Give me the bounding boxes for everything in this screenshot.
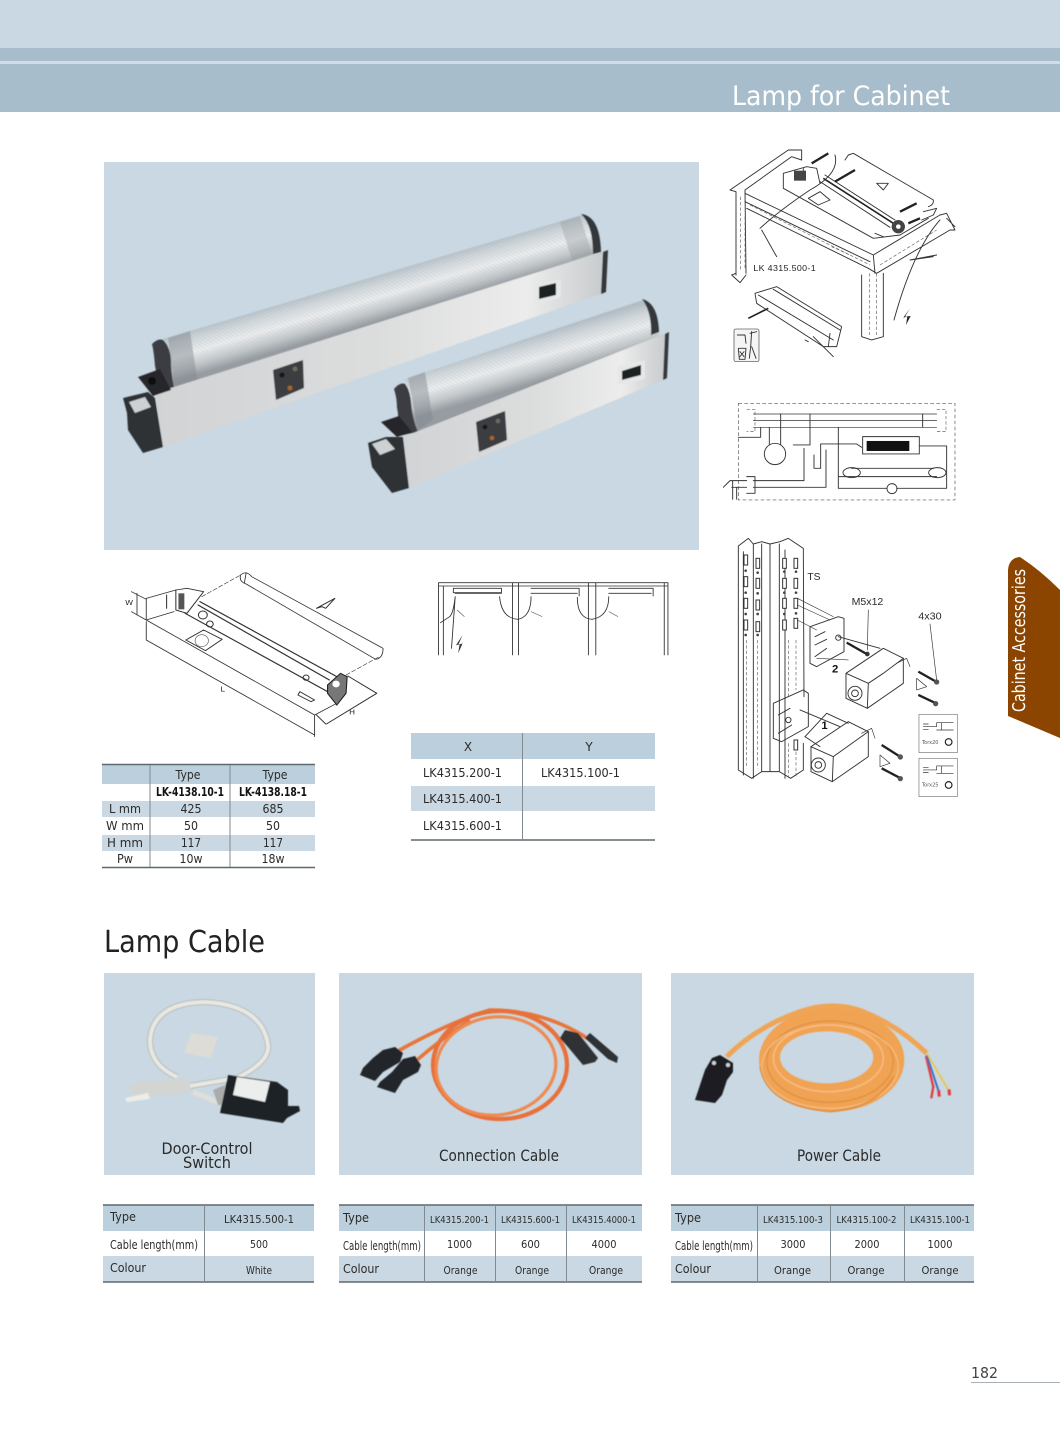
table: cable X and Y	[411, 733, 655, 840]
table: power cable specs: LK4315.100-2	[836, 1215, 896, 1226]
icon: Torx25 tool: Torx25	[921, 783, 938, 789]
table: power cable specs: Orange	[922, 1265, 958, 1277]
diagram: cabinet mounting assembly	[730, 150, 955, 362]
label: L: L	[220, 685, 226, 694]
table: connection cable specs	[339, 1205, 642, 1282]
page number: 182	[971, 1364, 998, 1382]
panel: door-control switch	[104, 973, 315, 1175]
table: lamp dimensions: Pw	[117, 852, 133, 866]
table: connection cable specs: Type	[342, 1211, 369, 1225]
table: power cable specs: 2000	[854, 1238, 880, 1251]
table: power cable specs: 1000	[928, 1238, 952, 1251]
table: lamp dimensions: Type	[175, 768, 200, 782]
table: lamp dimensions: 117	[263, 836, 283, 850]
table: cable X and Y: LK4315.400-1	[423, 792, 502, 806]
table: power cable specs: LK4315.100-1	[910, 1215, 970, 1226]
image: power cable	[695, 1006, 950, 1112]
table: lamp dimensions: LK-4138.10-1	[156, 785, 224, 799]
label: step 1: 1	[821, 720, 828, 732]
table: connection cable specs: Orange	[444, 1265, 478, 1277]
image: door-control switch	[125, 1002, 300, 1123]
table: power cable specs: LK4315.100-3	[763, 1215, 823, 1226]
label: Door-Control Switch: Switch	[183, 1153, 231, 1172]
table: connection cable specs: LK4315.600-1	[501, 1215, 560, 1226]
label: M5x12: M5x12	[852, 597, 884, 608]
table: door-control switch specs: LK4315.500-1	[224, 1213, 294, 1226]
panel: connection cable	[339, 973, 642, 1175]
table: door-control switch specs: Cable length(mm)	[110, 1238, 198, 1252]
icon: Torx20 tool	[919, 714, 957, 753]
table: lamp dimensions: 50	[266, 819, 280, 833]
table: connection cable specs: 4000	[592, 1238, 616, 1251]
table: lamp dimensions: L mm	[109, 802, 141, 816]
icon: Torx20 tool: Torx20	[921, 740, 938, 746]
table: door-control switch specs: White	[246, 1265, 272, 1277]
label: step 2: 2	[832, 664, 838, 676]
table: lamp dimensions: 117	[181, 836, 201, 850]
table: power cable specs	[671, 1205, 974, 1282]
heading: Lamp Cable: Lamp Cable	[104, 925, 265, 960]
panel: power cable	[671, 973, 974, 1175]
table: lamp dimensions	[102, 764, 315, 868]
title: Lamp for Cabinet	[732, 81, 950, 112]
table: power cable specs: Colour	[675, 1262, 711, 1276]
table: lamp dimensions: LK-4138.18-1	[239, 785, 307, 799]
side tab: Cabinet Accessories: Cabinet Accessories	[1009, 569, 1030, 712]
label: 4x30: 4x30	[918, 611, 942, 622]
label: W: W	[125, 598, 134, 607]
table: power cable specs: Orange	[848, 1265, 884, 1277]
table: lamp dimensions: Type	[262, 768, 288, 782]
diagram: door switch post assembly	[738, 538, 957, 797]
table: power cable specs: Orange	[774, 1265, 811, 1277]
table: connection cable specs: 1000	[447, 1238, 472, 1251]
table: cable X and Y: X	[464, 740, 472, 754]
header band	[0, 0, 1060, 112]
table: lamp dimensions: H mm	[107, 836, 143, 850]
callout: part number: LK 4315.500-1	[753, 263, 816, 273]
label: Door-Control Switch: Door-Control	[162, 1139, 252, 1158]
table: cable X and Y: LK4315.100-1	[541, 766, 620, 780]
diagram: lamp dimensions	[125, 573, 383, 737]
table: connection cable specs: LK4315.4000-1	[572, 1215, 636, 1226]
table: connection cable specs: 600	[521, 1238, 540, 1251]
diagram: cable layout in cabinet	[439, 583, 668, 655]
table: lamp dimensions: 10w	[180, 852, 203, 866]
table: power cable specs: Cable length(mm)	[675, 1239, 753, 1253]
image: large cabinet lamp	[123, 214, 608, 453]
image: connection cable	[360, 1009, 618, 1123]
table: connection cable specs: LK4315.200-1	[430, 1215, 489, 1226]
table: lamp dimensions: 425	[180, 802, 202, 816]
table: cable X and Y: LK4315.200-1	[423, 766, 502, 780]
table: door-control switch specs: Type	[109, 1210, 136, 1224]
image: small cabinet lamp	[368, 299, 669, 493]
label: Power Cable: Power Cable	[797, 1146, 881, 1165]
table: lamp dimensions: 685	[262, 802, 284, 816]
page number	[971, 1364, 1060, 1382]
label: TS: TS	[807, 572, 821, 583]
table: door-control switch specs	[103, 1205, 314, 1282]
side tab: Cabinet Accessories	[1008, 557, 1060, 738]
label: H: H	[349, 708, 355, 716]
diagram: wiring schematic	[723, 403, 955, 500]
table: connection cable specs: Orange	[515, 1265, 549, 1277]
table: connection cable specs: Cable length(mm)	[343, 1239, 421, 1253]
table: cable X and Y: Y	[584, 740, 593, 754]
table: power cable specs: Type	[674, 1211, 701, 1225]
table: power cable specs: 3000	[780, 1238, 806, 1251]
panel: main lamp photo	[104, 162, 699, 550]
label: Connection Cable: Connection Cable	[439, 1146, 559, 1165]
table: connection cable specs: Colour	[343, 1262, 379, 1276]
table: lamp dimensions: W mm	[106, 819, 144, 833]
table: door-control switch specs: Colour	[110, 1261, 146, 1275]
table: lamp dimensions: 18w	[262, 852, 285, 866]
table: door-control switch specs: 500	[250, 1238, 268, 1251]
icon: Torx25 tool	[919, 758, 957, 797]
label: Door-Control Switch	[162, 1139, 252, 1172]
table: cable X and Y: LK4315.600-1	[423, 819, 502, 833]
table: connection cable specs: Orange	[589, 1265, 623, 1277]
table: lamp dimensions: 50	[184, 819, 198, 833]
